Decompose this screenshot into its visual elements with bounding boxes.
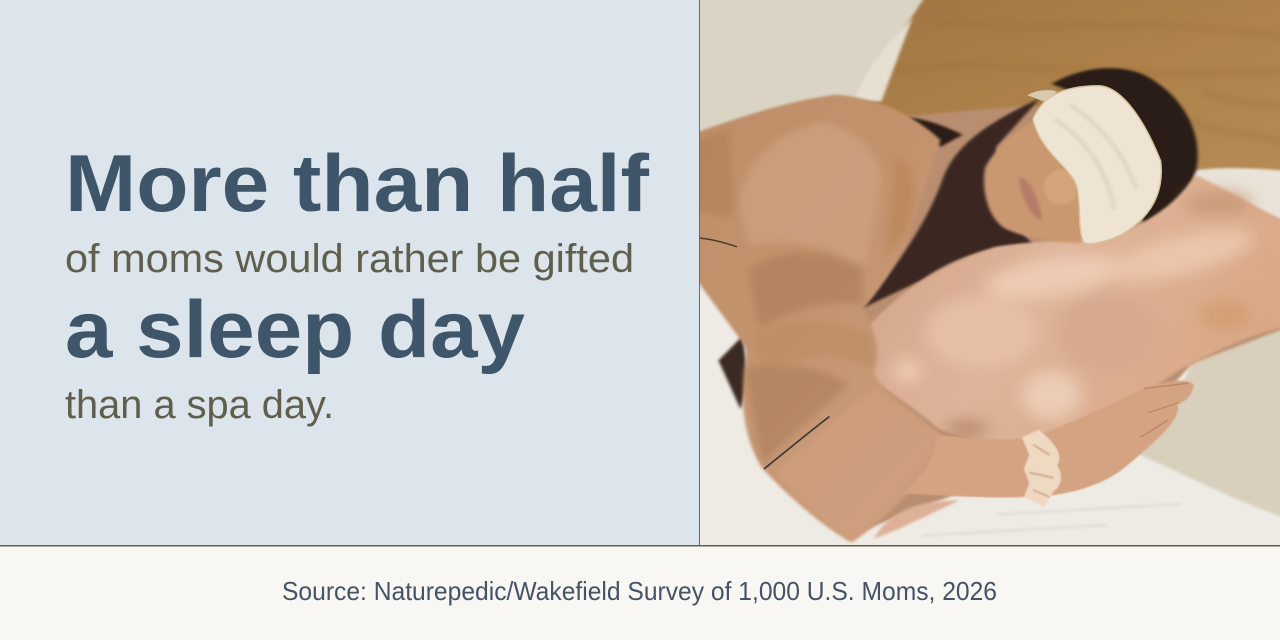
heading: a sleep day: a sleep day — [65, 285, 525, 375]
nose and lips — [1019, 170, 1077, 220]
top-left pillow — [689, 0, 929, 140]
text: of moms would rather be gifted: of moms would rather be gifted — [65, 237, 634, 281]
hair — [718, 68, 1198, 410]
scrunchie — [1022, 430, 1061, 507]
lower right pillow — [1140, 322, 1280, 521]
heading: More than half: More than half — [65, 139, 650, 229]
robe: torso and sleeve — [689, 94, 940, 542]
bottom and left sheets — [685, 245, 1280, 563]
right sheet behind pillow — [1188, 168, 1280, 231]
satin pillow — [859, 175, 1280, 444]
face — [984, 119, 1081, 243]
photo: woman sleeping on satin pillow wearing an eye mask — [700, 0, 1280, 545]
panel: headline — [0, 0, 699, 545]
arm and hand — [904, 381, 1194, 497]
eye mask — [1027, 86, 1161, 244]
divider line: vertical — [699, 0, 700, 545]
background wood headboard — [693, 0, 1280, 245]
text: than a spa day: than a spa day. — [65, 383, 334, 427]
footer band with source — [0, 545, 1280, 606]
robe hem under arm — [874, 500, 959, 539]
source text: Source: Naturepedic/Wakefield Survey of 1,000 U.S. Moms, 2026 — [282, 576, 997, 606]
filler under robe and satin pillow — [715, 105, 1280, 532]
